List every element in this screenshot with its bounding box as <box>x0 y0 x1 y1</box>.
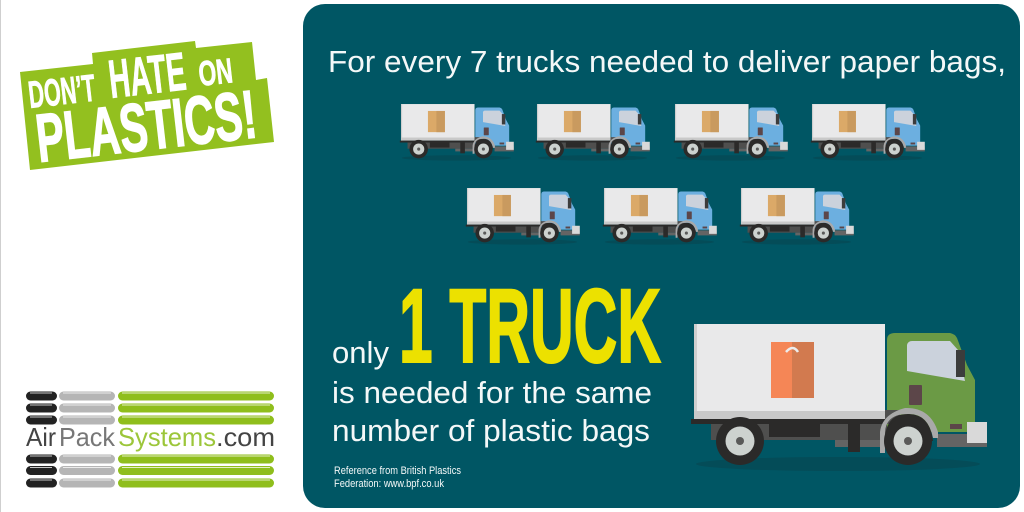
large green truck with plastic bag <box>691 324 987 471</box>
logo: Air Pack Systems: Pack <box>59 422 116 452</box>
text: only: only <box>332 335 389 370</box>
badge: Don't hate on plastics: PLASTICS! <box>32 76 260 177</box>
badge: Don't hate on plastics: DON’T <box>26 68 98 117</box>
heading: for every 7 trucks: For every 7 trucks needed to deliver paper bags, <box>328 44 1006 79</box>
badge: Don't hate on plastics: HATE <box>106 42 189 110</box>
badge: Don't hate on plastics <box>20 41 274 177</box>
truck 2 <box>536 104 650 161</box>
truck 7 <box>740 188 854 245</box>
truck 5 <box>466 188 580 245</box>
logo: Air Pack Systems: .com <box>216 422 275 452</box>
big number: 1 truck: 1 TRUCK <box>399 268 661 385</box>
reference note <box>334 465 461 490</box>
panel: main teal background <box>303 4 1020 508</box>
truck 6 <box>603 188 717 245</box>
truck 1 <box>400 104 514 161</box>
logo: Air Pack Systems <box>26 392 275 488</box>
truck 4 <box>811 104 925 161</box>
reference note: Reference from British Plastics <box>334 465 461 477</box>
icon: plastic bag <box>771 342 814 398</box>
left edge line <box>0 0 1 512</box>
text: is needed for the same: is needed for the same <box>332 375 652 410</box>
badge: Don't hate on plastics: ON <box>196 51 235 94</box>
reference note: Federation: www.bpf.co.uk <box>334 478 444 490</box>
text: number of plastic bags: number of plastic bags <box>332 413 650 448</box>
logo: Air Pack Systems: Air <box>26 422 56 452</box>
truck 3 <box>674 104 788 161</box>
logo: Air Pack Systems: Systems <box>118 422 216 452</box>
